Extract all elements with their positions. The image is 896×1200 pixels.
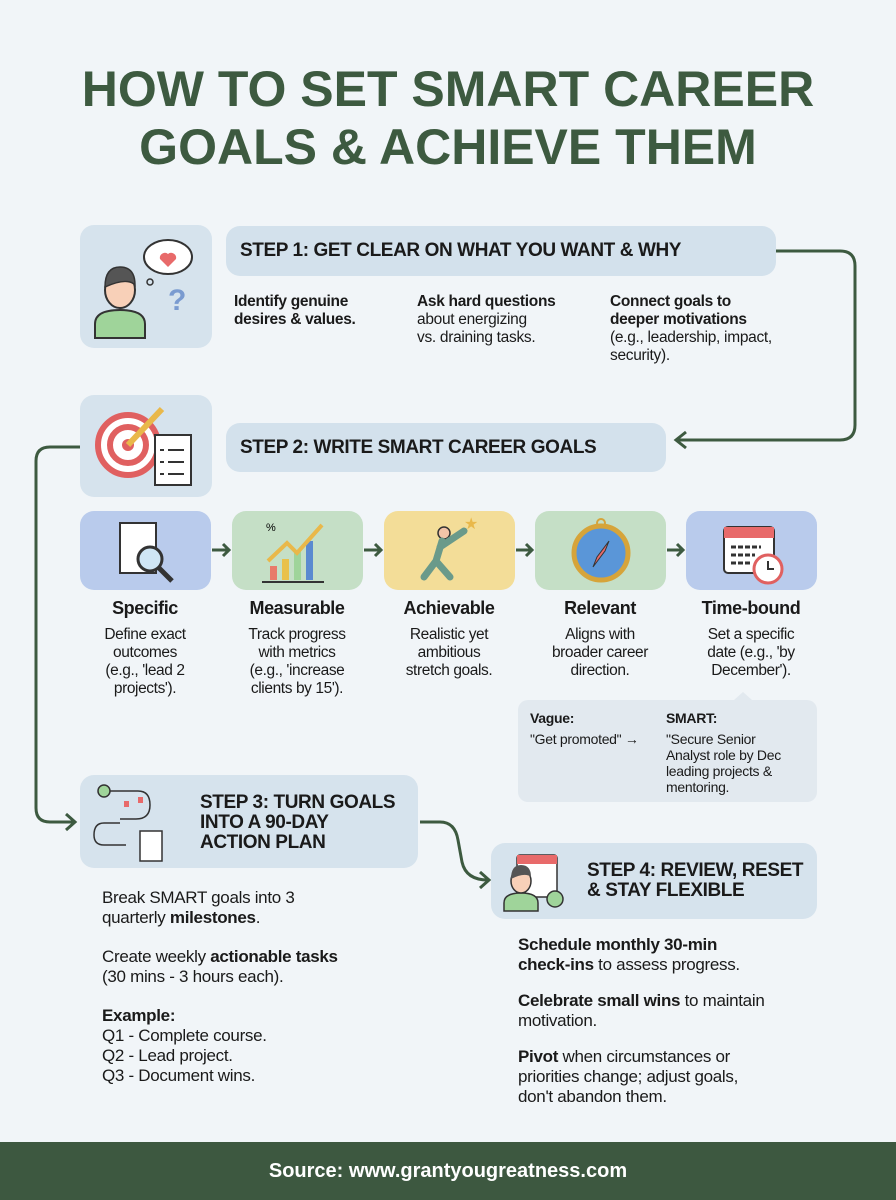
footer — [0, 1142, 896, 1200]
text: Achievable — [403, 598, 495, 618]
step 3 header: STEP 3: TURN GOALS — [200, 792, 395, 813]
step 3 text: (30 mins - 3 hours each). — [102, 967, 283, 986]
callout: vague vs smart: Vague: — [530, 710, 574, 726]
title: GOALS & ACHIEVE THEM — [139, 119, 757, 175]
text: direction. — [571, 662, 629, 679]
step 4 text: Celebrate small wins to maintain — [518, 991, 764, 1010]
text: Realistic yet — [410, 626, 488, 643]
step 4 text: Pivot when circumstances or — [518, 1047, 730, 1066]
text: step1 col2: vs. draining tasks. — [417, 329, 535, 346]
step 3 text: Q3 - Document wins. — [102, 1066, 255, 1085]
step 4 text: check-ins to assess progress. — [518, 955, 740, 974]
step 3 text: quarterly milestones. — [102, 908, 260, 927]
step 3 header: ACTION PLAN — [200, 832, 325, 853]
smart cards — [80, 511, 211, 590]
title: HOW TO SET SMART CAREER — [82, 61, 814, 117]
step 4 text: priorities change; adjust goals, — [518, 1067, 738, 1086]
step 3 text: Break SMART goals into 3 — [102, 888, 294, 907]
text: (e.g., 'increase — [250, 662, 344, 679]
text: step1 col1 — [234, 293, 356, 328]
text: step1 col1: desires & values. — [234, 311, 356, 328]
text: Set a specific — [708, 626, 794, 643]
heading: step 1 — [226, 226, 776, 276]
text: projects'). — [114, 680, 176, 697]
title — [82, 61, 814, 175]
text: Track progress — [248, 626, 346, 643]
step 4 text: motivation. — [518, 1011, 597, 1030]
labels: Specific — [112, 598, 178, 618]
text: step1 col3: (e.g., leadership, impact, — [610, 329, 772, 346]
callout: vague vs smart — [518, 700, 817, 802]
step 3 text: Q1 - Complete course. — [102, 1026, 267, 1045]
text: step1 col3: security). — [610, 347, 670, 364]
text: Define exact — [104, 626, 186, 643]
step 4 text: don't abandon them. — [518, 1087, 667, 1106]
heading: step 2 — [226, 423, 666, 472]
text: % — [266, 522, 276, 534]
step 4 header: STEP 4: REVIEW, RESET — [587, 860, 803, 881]
text: date (e.g., 'by — [707, 644, 795, 661]
text: ambitious — [418, 644, 480, 661]
step 4 text — [518, 935, 764, 1106]
step 4 header: & STAY FLEXIBLE — [587, 880, 744, 901]
text: step1 col2: Ask hard questions — [417, 293, 555, 310]
callout: vague vs smart: SMART: — [666, 710, 717, 726]
text: Measurable — [249, 598, 345, 618]
step 4 header — [491, 843, 817, 919]
icon: person thinking: ? — [168, 284, 186, 317]
text: step1 col1: Identify genuine — [234, 293, 348, 310]
text: step1 col3: Connect goals to — [610, 293, 731, 310]
text: December'). — [711, 662, 791, 679]
text: outcomes — [113, 644, 177, 661]
heading: step 2: STEP 2: WRITE SMART CAREER GOALS — [240, 436, 596, 458]
footer: Source: www.grantyougreatness.com — [269, 1160, 627, 1182]
callout: vague vs smart: mentoring. — [666, 779, 729, 795]
callout: vague vs smart: "Get promoted" → — [530, 731, 639, 747]
text: with metrics — [258, 644, 336, 661]
text: Relevant — [564, 598, 636, 618]
text: (e.g., 'lead 2 — [105, 662, 185, 679]
text: stretch goals. — [406, 662, 492, 679]
text: broader career — [552, 644, 648, 661]
text: step1 col3 — [610, 293, 772, 364]
icon: person thinking — [80, 225, 212, 348]
callout: vague vs smart: Analyst role by Dec — [666, 747, 781, 763]
text: Time-bound — [702, 598, 800, 618]
icon: target — [80, 395, 212, 497]
step 3 header: INTO A 90-DAY — [200, 812, 329, 833]
card arrows — [212, 543, 685, 557]
callout: vague vs smart: leading projects & — [666, 763, 772, 779]
step 4 text: Schedule monthly 30-min — [518, 935, 717, 954]
text: ★ — [464, 516, 478, 533]
step 3 text: Example: — [102, 1006, 175, 1025]
step 3 text — [102, 888, 338, 1085]
step 3 text: Q2 - Lead project. — [102, 1046, 233, 1065]
text: step1 col3: deeper motivations — [610, 311, 747, 328]
callout: vague vs smart: "Secure Senior — [666, 731, 756, 747]
step 3 header — [80, 775, 418, 868]
text: clients by 15'). — [251, 680, 343, 697]
heading: step 1: STEP 1: GET CLEAR ON WHAT YOU WANT & WHY — [240, 240, 681, 261]
text: step1 col2: about energizing — [417, 311, 527, 328]
step 3 text: Create weekly actionable tasks — [102, 947, 338, 966]
text: step1 col2 — [417, 293, 556, 346]
text: Aligns with — [565, 626, 635, 643]
